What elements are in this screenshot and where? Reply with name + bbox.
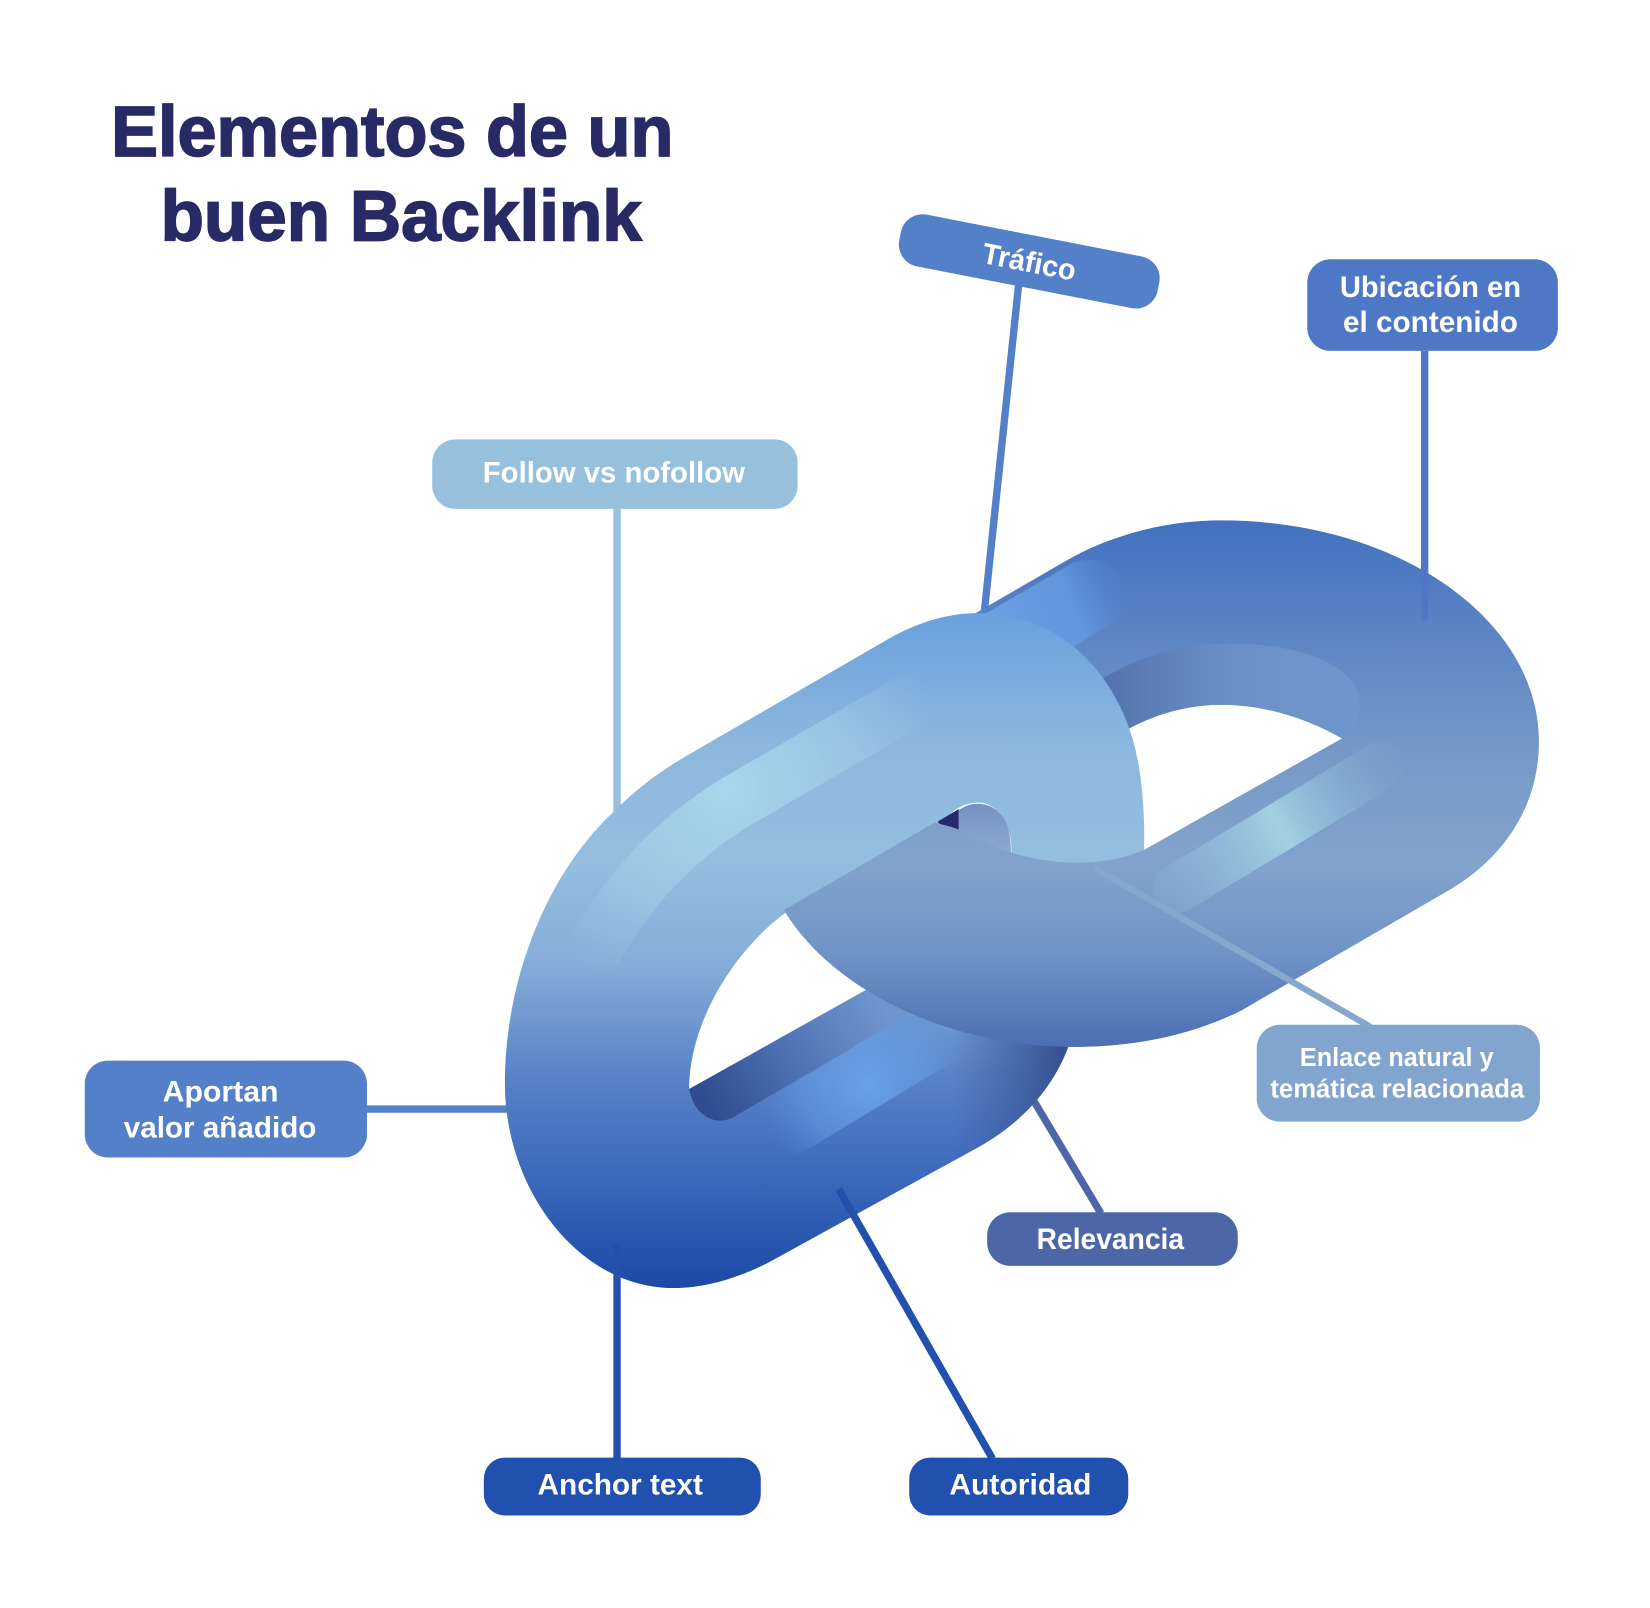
left link: dark triangle: [938, 809, 959, 852]
left link: lower bar highlight: [737, 1013, 995, 1157]
right link: front arc: [784, 794, 1368, 1047]
connector: Tráfico: [984, 284, 1019, 615]
right link: lower bar highlight: [1177, 766, 1381, 889]
connector: Follow vs nofollow: [614, 509, 621, 815]
label: Ubicación en el contenido: el contenido: [1343, 306, 1518, 339]
title: [111, 92, 673, 256]
left link: lower bar inner wall: [689, 986, 910, 1121]
left link: lower bar shade: [952, 1021, 1068, 1163]
label: Relevancia: Relevancia: [1037, 1223, 1185, 1256]
label: Enlace natural y temática relacionada: [1257, 1025, 1540, 1122]
label: Enlace natural y temática relacionada: Enlace natural y: [1300, 1042, 1494, 1072]
label: Enlace natural y temática relacionada: temática relacionada: [1270, 1073, 1525, 1103]
right link: body: [784, 520, 1539, 1047]
right link: top bar highlight: [973, 560, 1131, 660]
label: Anchor text: [484, 1458, 761, 1515]
label: Autoridad: Autoridad: [949, 1468, 1091, 1501]
label: Aportan valor añadido: [85, 1061, 367, 1157]
left link: body: [505, 613, 1144, 1288]
connector: Anchor text: [614, 1245, 621, 1459]
label: Follow vs nofollow: [432, 439, 798, 509]
label: Follow vs nofollow: Follow vs nofollow: [483, 457, 745, 490]
chain link illustration: [505, 520, 1539, 1288]
label: Aportan valor añadido: Aportan: [163, 1076, 279, 1109]
connector: Autoridad: [839, 1189, 992, 1459]
right link: inner wall: [1103, 644, 1360, 738]
title: buen Backlink: [161, 176, 642, 256]
label: Ubicación en el contenido: [1307, 259, 1558, 351]
left link: inner wall small: [959, 804, 1011, 878]
label: Relevancia: [987, 1212, 1238, 1266]
label: Anchor text: Anchor text: [538, 1468, 703, 1501]
label: Ubicación en el contenido: Ubicación en: [1340, 271, 1521, 304]
left link: top-left highlight: [576, 692, 926, 984]
connector: Ubicación en el contenido: [1421, 351, 1428, 620]
label: Tráfico: [895, 210, 1164, 312]
label: Tráfico: Tráfico: [979, 237, 1079, 288]
connector: Relevancia: [1026, 1088, 1101, 1213]
title: Elementos de un: [111, 92, 673, 172]
connector: Aportan valor añadido: [367, 1106, 510, 1113]
label: Aportan valor añadido: valor añadido: [124, 1111, 316, 1144]
connector: Enlace natural: [1095, 868, 1370, 1027]
label: Autoridad: [909, 1458, 1128, 1515]
